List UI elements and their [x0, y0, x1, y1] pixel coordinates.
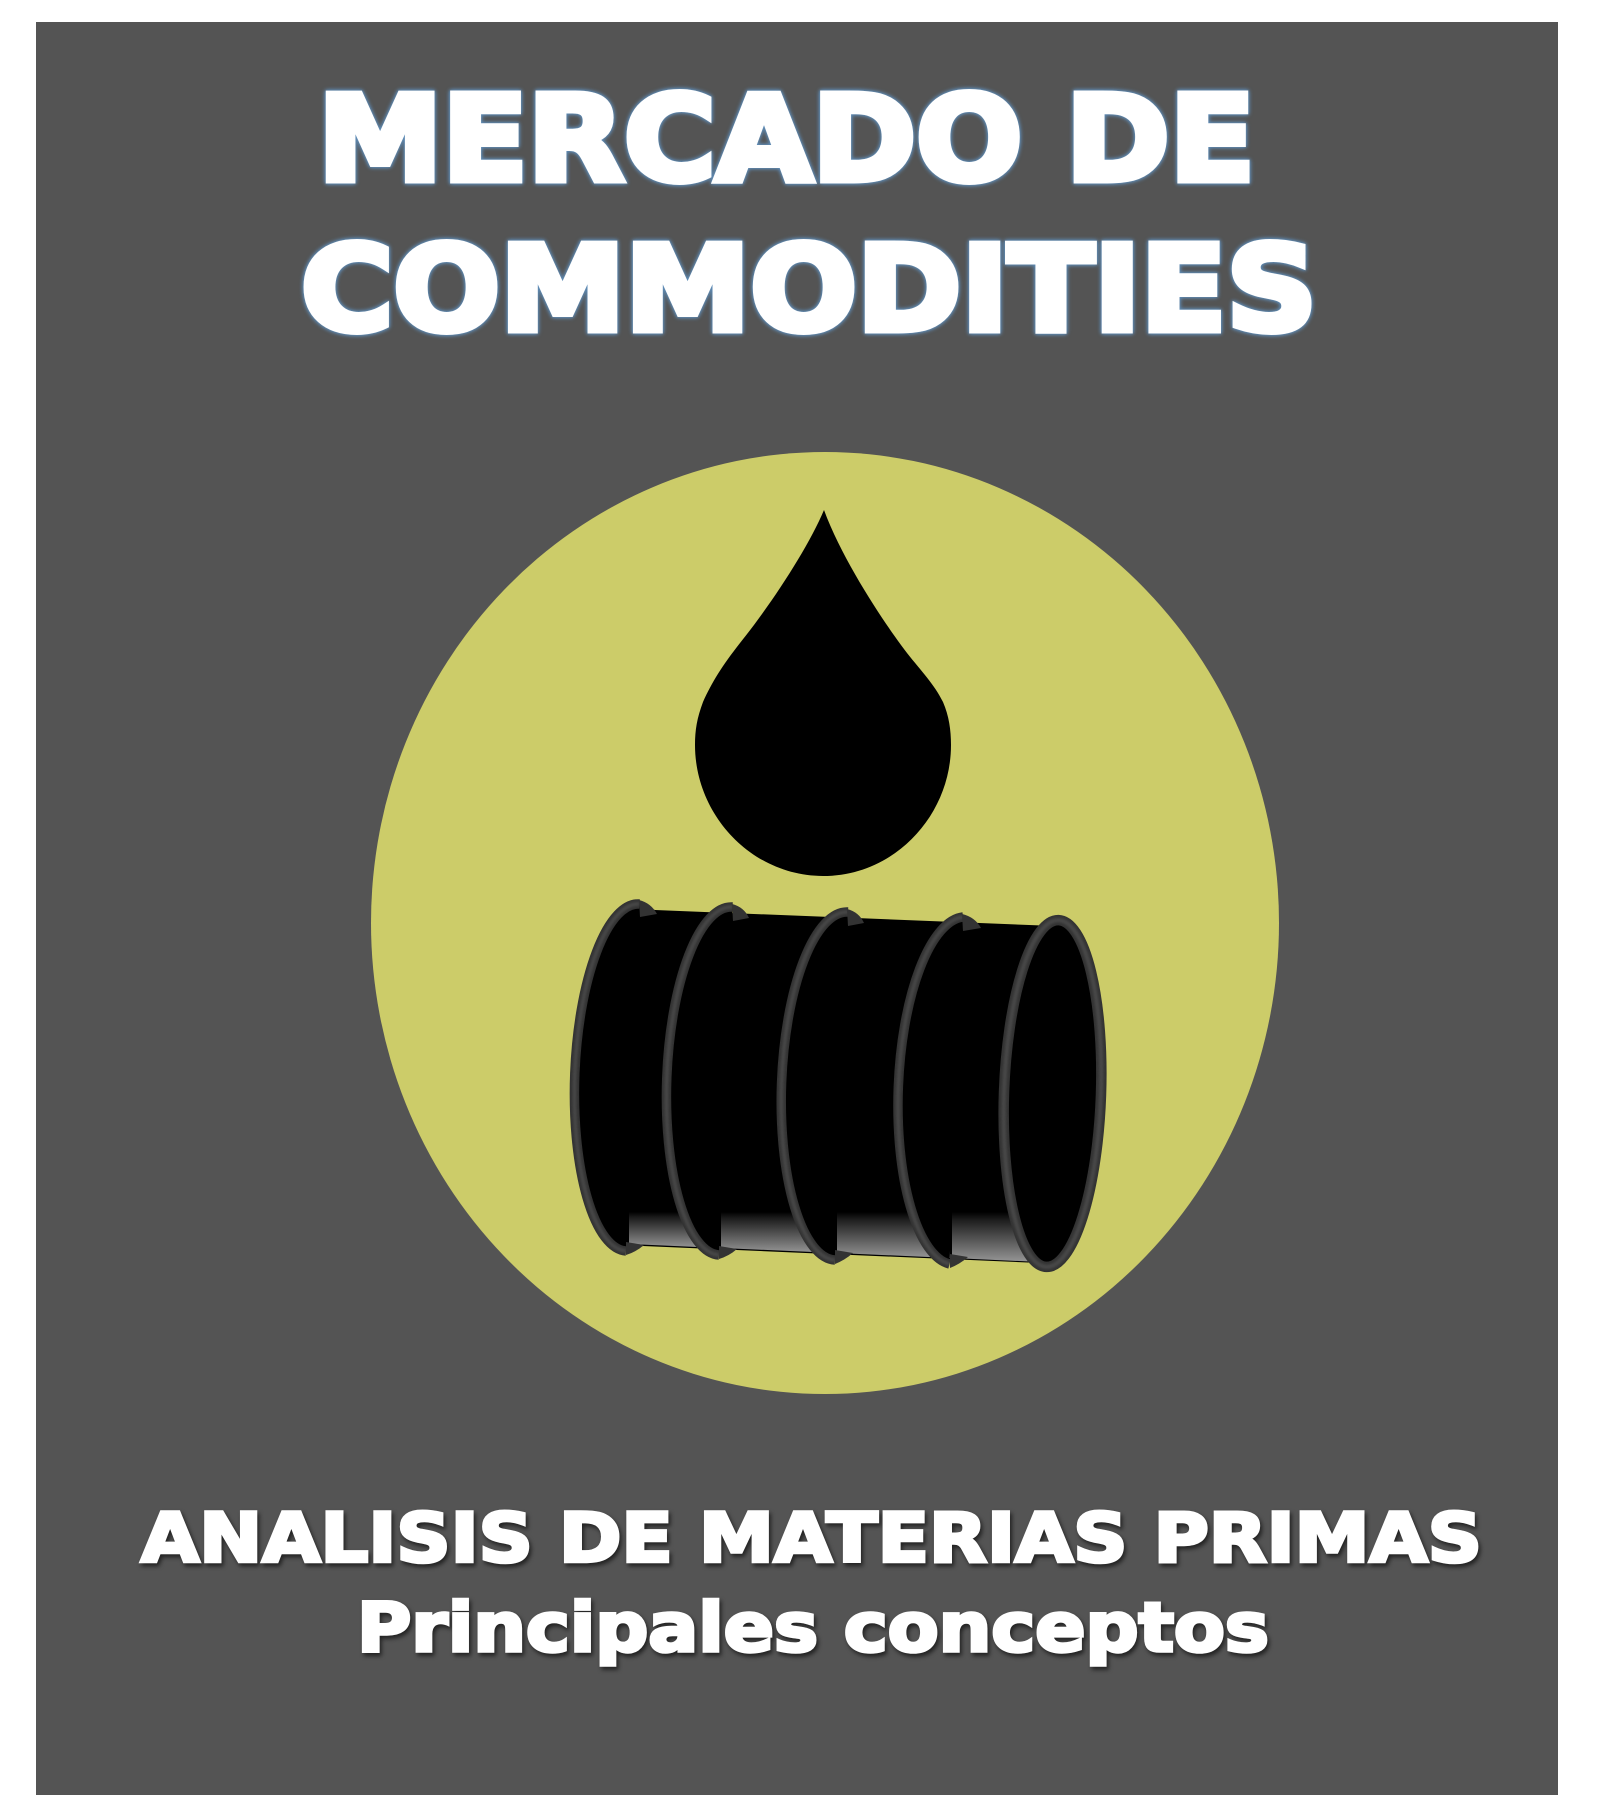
title [301, 70, 1317, 358]
title: COMMODITIES [301, 220, 1317, 358]
barrel body [574, 904, 1055, 1263]
subtitle: ANALISIS DE MATERIAS PRIMAS [141, 1500, 1482, 1578]
barrel highlights and hoops [574, 900, 1040, 1268]
barrel front opening [998, 918, 1107, 1269]
yellow circle [371, 452, 1279, 1394]
icon: oil barrel [574, 900, 1107, 1269]
subtitle: Principales conceptos [357, 1589, 1269, 1668]
subtitle [141, 1500, 1482, 1668]
icon: oil drop [695, 510, 951, 876]
title: MERCADO DE [318, 70, 1255, 208]
